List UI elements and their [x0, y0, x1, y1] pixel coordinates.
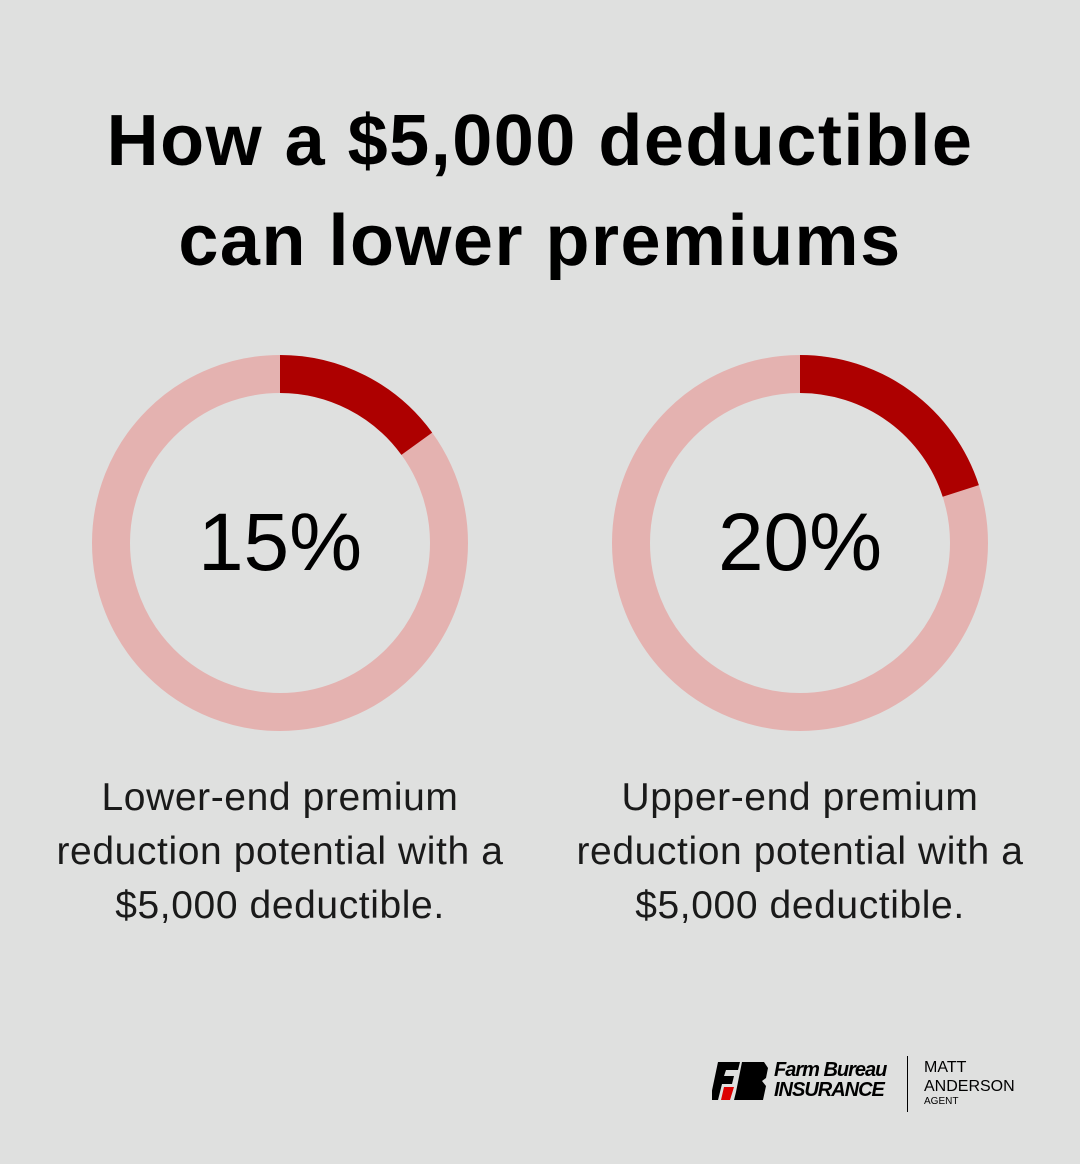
- text: agent name: ANDERSON: [924, 1078, 1015, 1095]
- text: lower-end label: Lower-end premium: [101, 776, 458, 819]
- text: upper-end label: reduction potential with a: [576, 830, 1024, 873]
- chart: donut 20%: [612, 355, 988, 731]
- text: agent name: [924, 1059, 1015, 1107]
- text: agent name: AGENT: [924, 1096, 958, 1107]
- text: upper-end label: $5,000 deductible.: [635, 884, 965, 927]
- icon: FB mark: [712, 1062, 768, 1100]
- text: agent name: MATT: [924, 1059, 966, 1076]
- text: lower-end label: reduction potential with a: [56, 830, 504, 873]
- chart: donut 20%: 20%: [718, 497, 882, 588]
- chart: donut 15%: 15%: [198, 497, 362, 588]
- title: can lower premiums: [178, 201, 902, 281]
- text: lower-end label: $5,000 deductible.: [115, 884, 445, 927]
- logo: Farm Bureau Insurance / agent: [712, 1056, 1015, 1112]
- text: brand: [774, 1059, 887, 1101]
- text: upper-end label: [576, 776, 1024, 927]
- text: brand: INSURANCE: [774, 1079, 884, 1101]
- text: brand: Farm Bureau: [774, 1059, 886, 1081]
- title: How a $5,000 deductible: [107, 101, 973, 181]
- title: [107, 101, 973, 281]
- text: lower-end label: [56, 776, 504, 927]
- chart: donut 15%: [92, 355, 468, 731]
- text: upper-end label: Upper-end premium: [621, 776, 978, 819]
